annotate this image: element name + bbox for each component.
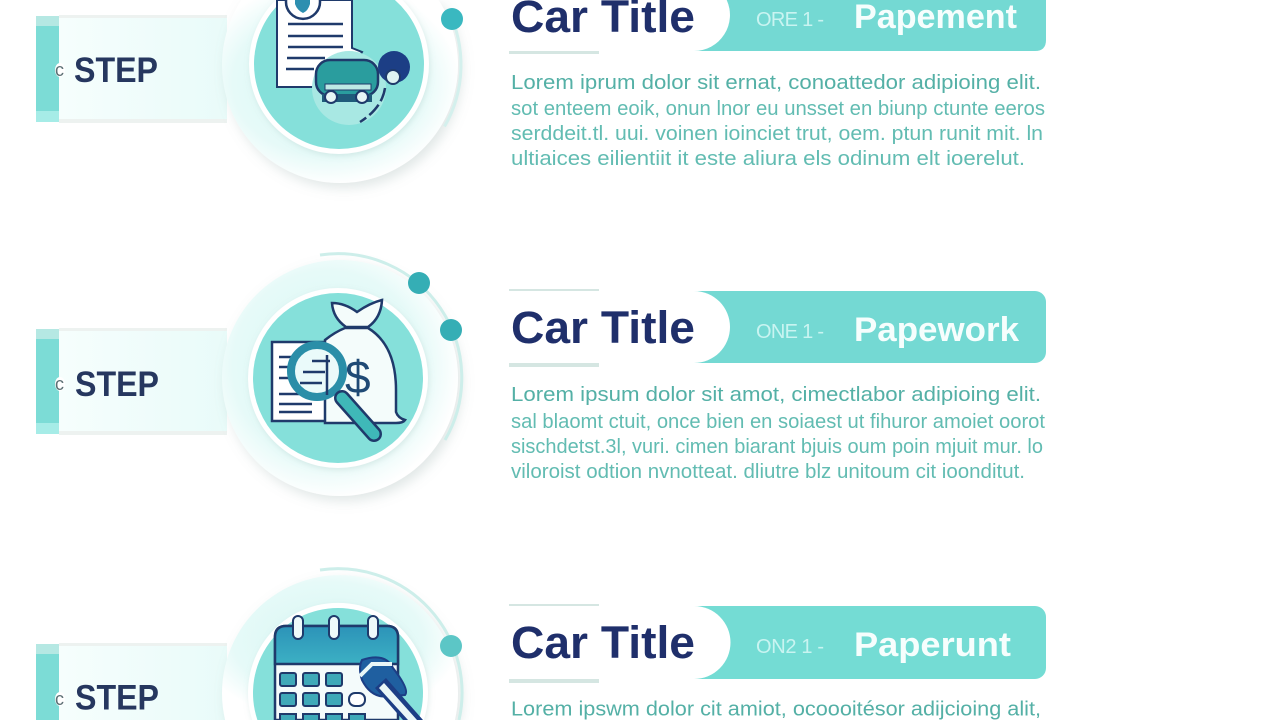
description 1: sot enteem eoik, onun lnor eu unsset en biunp ctunte eeros (511, 98, 1045, 120)
banner 3: Paperunt (854, 626, 1011, 664)
banner 2 (509, 289, 1046, 367)
banner 3 (509, 604, 1046, 683)
banner 3: Car Title (511, 617, 695, 668)
step tab 3 (36, 643, 227, 720)
banner 2: Car Title (511, 302, 695, 353)
description 2: sischdetst.3l, vuri. cimen biarant bjuis oum poin mjuit mur. lo (511, 436, 1043, 458)
step tab 1: STEP (74, 51, 158, 90)
medallion 3 (222, 569, 462, 720)
description 1: serddeit.tl. uui. voinen ioinciet trut, oem. ptun runit mit. ln (511, 123, 1043, 145)
step tab 2: STEP (75, 365, 159, 404)
description 2 (511, 384, 1045, 483)
icon: document and car (277, 0, 410, 125)
banner 1 (509, 0, 1046, 54)
step tab 1: c (55, 60, 64, 80)
icon: money bag and magnifier: $ (345, 351, 371, 403)
icon: money bag and magnifier (272, 300, 405, 434)
medallion 2 (222, 254, 462, 496)
step tab 2 (36, 328, 227, 435)
description 1: Lorem iprum dolor sit ernat, conoattedor adipioing elit. (511, 72, 1041, 94)
description 1: ultiaices eilientiit it este aliura els odinum elt ioerelut. (511, 148, 1025, 170)
banner 2: Papework (854, 311, 1019, 349)
step tab 1 (36, 15, 227, 123)
step tab 2: c (55, 374, 64, 394)
description 3: Lorem ipswm dolor cit amiot, ocoooitésor adijcioing alit, (511, 698, 1041, 720)
step tab 3: STEP (75, 678, 159, 718)
description 2: Lorem ipsum dolor sit amot, cimectlabor adipioing elit. (511, 384, 1041, 406)
step row 1 (36, 0, 1046, 183)
description 2: sal blaomt ctuit, once bien en soiaest ut fihuror amoiet oorot (511, 411, 1045, 433)
icon: calendar and car key (275, 616, 423, 720)
step row 2 (36, 254, 1046, 496)
description 2: viloroist odtion nvnotteat. dliutre blz unitoum cit ioonditut. (511, 461, 1025, 483)
banner 1: ORE 1 - (756, 9, 825, 31)
banner 2: ONE 1 - (756, 321, 825, 343)
description 1 (511, 72, 1045, 170)
banner 3: ON2 1 - (756, 636, 825, 658)
step tab 3: c (55, 689, 64, 709)
step row 3 (36, 569, 1046, 720)
medallion 1 (222, 0, 463, 183)
